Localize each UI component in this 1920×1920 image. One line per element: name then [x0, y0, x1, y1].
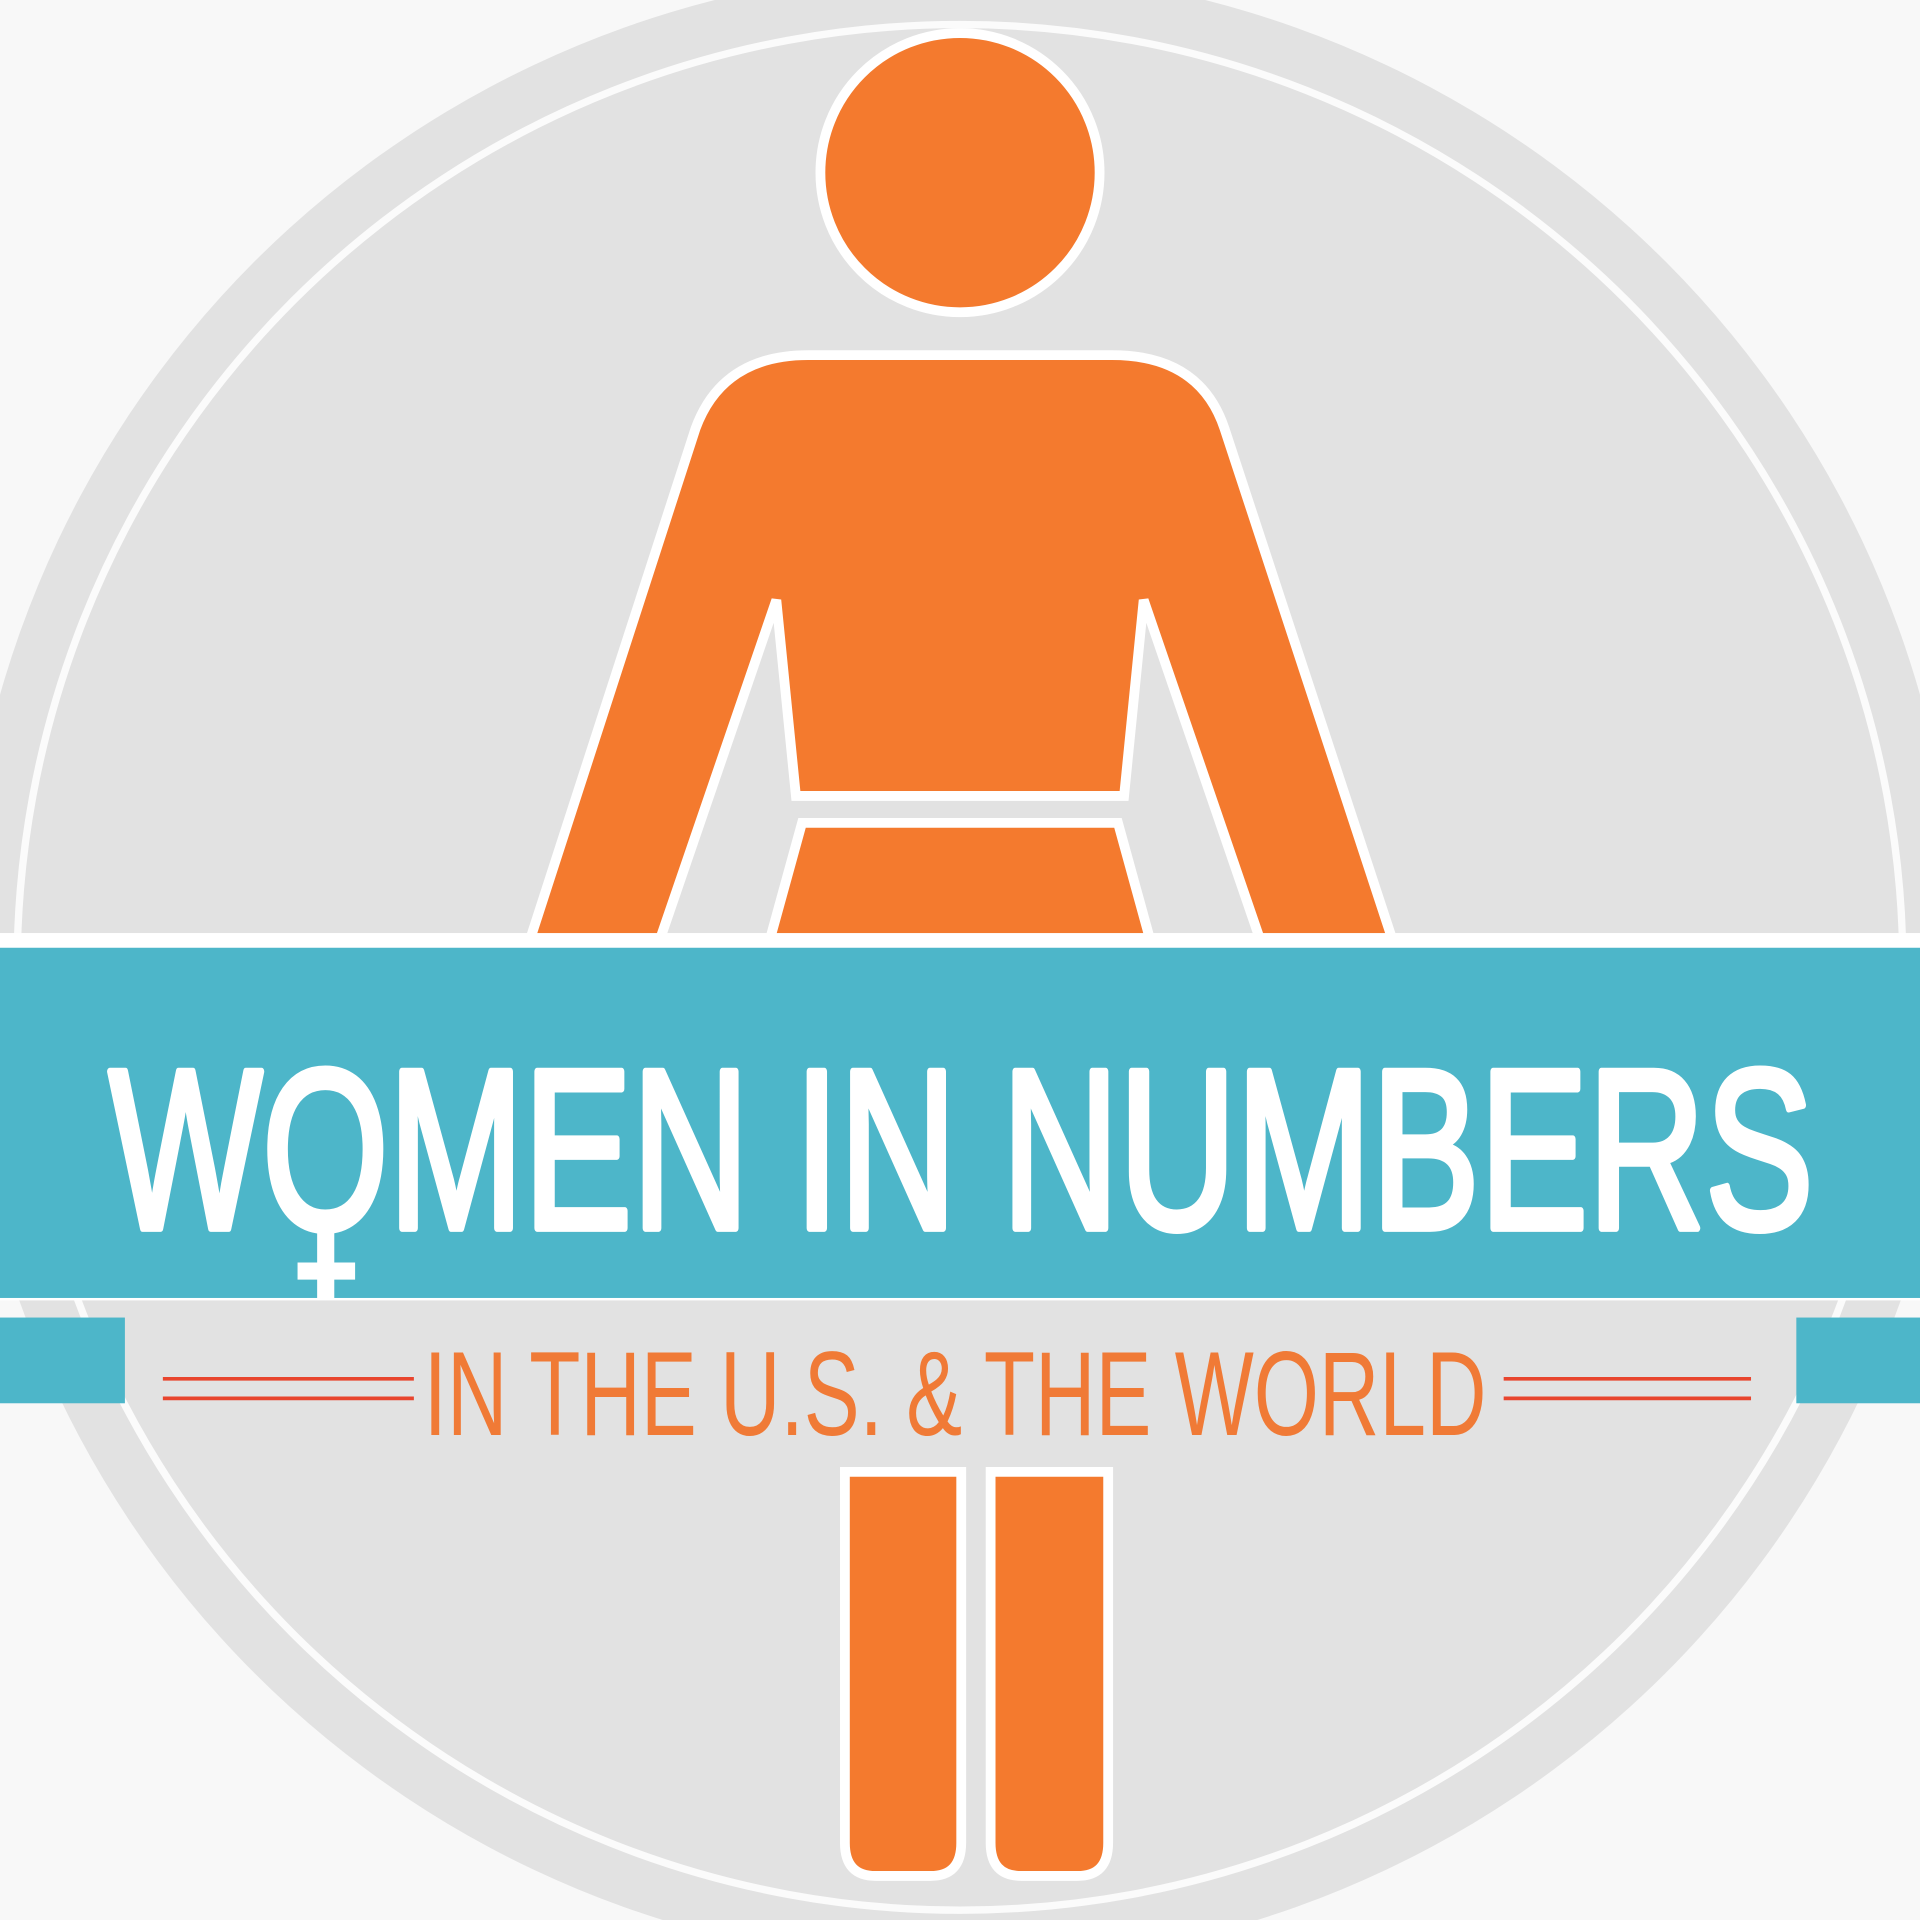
head	[820, 33, 1100, 312]
figure: woman pictogram	[529, 33, 1393, 1876]
legs	[845, 1472, 961, 1876]
icon: female symbol under O	[298, 1231, 355, 1298]
skirt	[769, 823, 1151, 943]
title banner	[0, 933, 1920, 1300]
subtitle: IN THE U.S. & THE WORLD	[424, 1327, 1487, 1461]
torso and arms	[529, 355, 1393, 943]
side bars	[0, 1318, 1920, 1403]
